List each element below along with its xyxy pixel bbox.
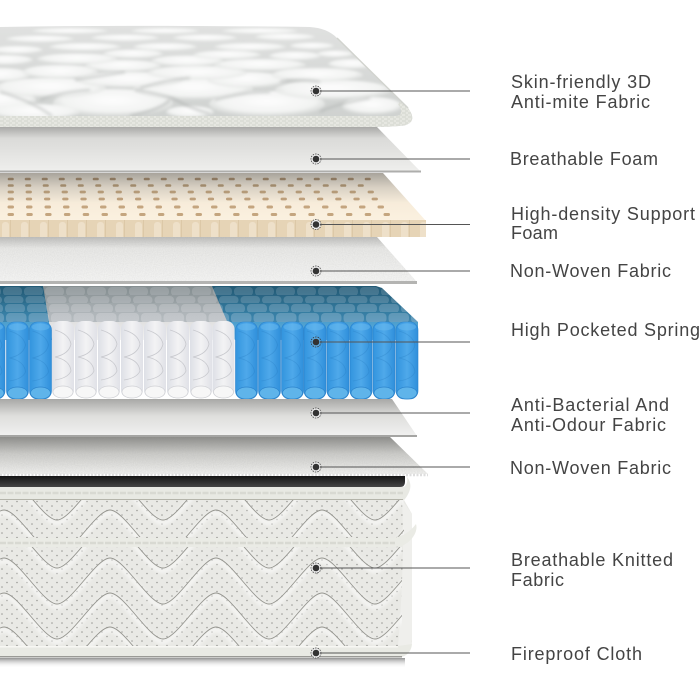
pointer xyxy=(311,220,470,230)
quilted bumps xyxy=(0,28,402,120)
back row cells xyxy=(0,286,420,322)
quilting creases xyxy=(0,72,370,116)
pointer xyxy=(311,154,470,164)
callout: lower non-woven fabric xyxy=(311,458,671,478)
floor shadow xyxy=(0,658,405,668)
callout: anti-bacterial fabric xyxy=(311,395,669,435)
white coils centre xyxy=(52,321,234,398)
panel: anti-bacterial fabric layer xyxy=(0,399,417,437)
label: Breathable Knitted xyxy=(511,550,673,570)
callout: fireproof cloth xyxy=(311,644,642,664)
label: Fireproof Cloth xyxy=(511,644,642,664)
panel: mattress base xyxy=(0,476,416,666)
label: Non-Woven Fabric xyxy=(510,458,671,478)
back rows base xyxy=(0,286,52,340)
fabric texture xyxy=(0,244,415,281)
top rail xyxy=(0,476,410,501)
pointer xyxy=(311,408,470,418)
ribbed side xyxy=(0,220,426,237)
upper panel quilting xyxy=(0,500,404,537)
callout: breathable knitted fabric xyxy=(311,550,673,590)
label: Anti-Odour Fabric xyxy=(511,415,666,435)
label: High-density Support xyxy=(511,204,695,224)
blue coils right xyxy=(236,322,418,399)
pointer xyxy=(311,266,470,276)
zigzag edge xyxy=(0,474,428,476)
panel: top quilted fabric layer xyxy=(0,26,412,127)
label: Non-Woven Fabric xyxy=(510,261,671,281)
foam edge xyxy=(0,170,421,172)
pointer xyxy=(311,563,470,573)
fabric texture xyxy=(0,458,426,474)
panel: lower non-woven fabric layer xyxy=(0,437,428,475)
pointer xyxy=(311,86,470,96)
label: High Pocketed Spring xyxy=(511,320,700,340)
label: Foam xyxy=(511,223,558,243)
fabric edge xyxy=(0,281,417,284)
label: Fabric xyxy=(511,570,564,590)
panel: pocketed springs xyxy=(0,286,420,399)
callout: breathable foam xyxy=(311,149,658,169)
pointer xyxy=(311,337,470,347)
fabric sheet xyxy=(0,399,417,436)
blue coils left xyxy=(0,322,52,399)
top pad surface xyxy=(0,26,412,127)
middle piping xyxy=(0,524,416,547)
pointer xyxy=(311,648,470,658)
fabric sheet xyxy=(0,437,428,474)
panel: support foam layer xyxy=(0,173,426,237)
bottom band xyxy=(0,644,412,657)
callout: skin-friendly fabric xyxy=(311,72,651,112)
callout: non-woven fabric xyxy=(311,261,671,281)
pointer xyxy=(311,462,470,472)
right corner xyxy=(398,500,412,657)
black gap xyxy=(0,476,405,487)
lower panel quilting xyxy=(0,547,402,646)
callout: high pocketed spring xyxy=(311,320,700,347)
panel: breathable foam layer xyxy=(0,127,421,172)
label: Anti-Bacterial And xyxy=(511,395,669,415)
fabric sheet xyxy=(0,237,417,282)
label: Skin-friendly 3D xyxy=(511,72,651,92)
label: Breathable Foam xyxy=(510,149,658,169)
perforation holes xyxy=(9,179,402,214)
panel: non-woven fabric layer xyxy=(0,237,417,284)
foam top surface xyxy=(0,173,426,221)
fabric edge xyxy=(0,435,417,437)
knit border xyxy=(0,101,412,127)
callout: high-density support foam xyxy=(311,204,695,243)
body side xyxy=(0,500,412,657)
label: Anti-mite Fabric xyxy=(511,92,650,112)
foam sheet xyxy=(0,127,421,172)
